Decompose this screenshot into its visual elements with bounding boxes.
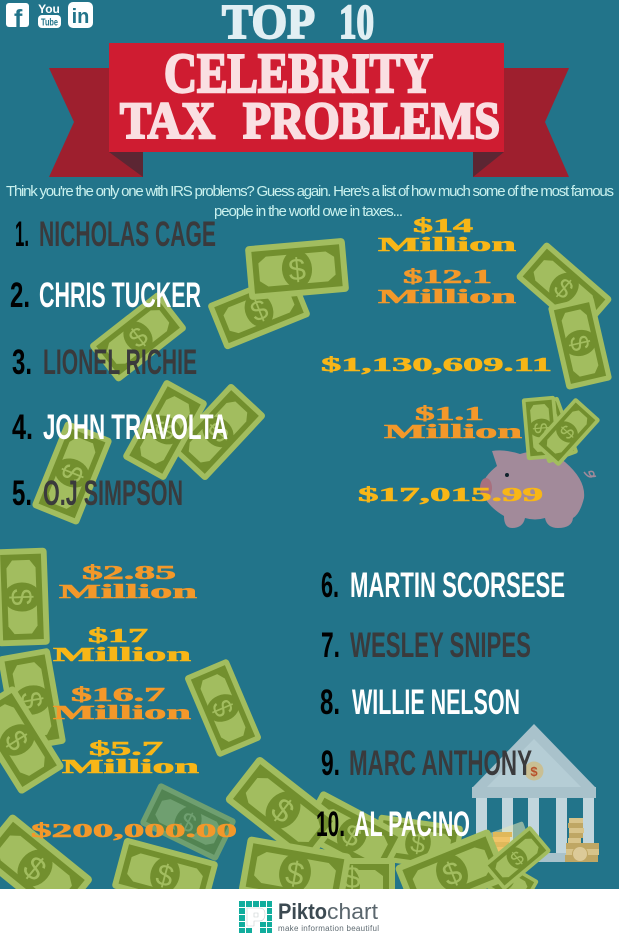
amount owed: 1: $14 [413,215,473,237]
intro text: Think you're the only one with IRS problems? Guess again. Here's a list of how much some of the most famous [6,183,614,200]
amount owed: 9 [62,738,199,778]
intro text: people in the world owe in taxes... [214,203,403,220]
name: LIONEL RICHIE [43,343,197,382]
bill: $ [123,320,154,354]
bill [89,291,187,383]
bill [394,828,510,918]
amount owed: 6: Million [59,581,197,603]
ribbon banner [49,43,569,177]
money bills: lower left [0,548,262,923]
bill [298,790,406,880]
bill (faded): $ [175,806,201,839]
bill: $ [206,695,240,721]
amount owed: 1: Million [378,234,516,256]
amount owed: 8 [53,684,191,724]
icon: LinkedIn: in [72,6,89,28]
icon: YouTube: Tube [41,18,58,28]
name: CHRIS TUCKER [39,276,201,315]
icon: Facebook: f [14,5,23,33]
amount owed: 6 [59,562,197,603]
money bills: in piggy bank [522,396,601,467]
bill [471,851,539,909]
amount owed: 7 [53,625,191,666]
wordmark: chart [327,899,378,924]
amount owed: 7: Million [53,644,191,666]
icon: piggy bank [480,450,596,528]
number 5: 5. [12,474,32,513]
ranked names: 6 to 10 [316,566,565,844]
bill: $ [409,827,428,859]
wordmark [278,899,378,924]
bill: $ [343,860,361,895]
bill: $ [437,853,467,893]
bill [184,658,262,758]
amount owed: 8: Million [53,702,191,724]
number 3: 3. [12,343,32,382]
coins behind bill [489,832,512,858]
bill: $ [556,421,580,444]
bill: $ [287,251,307,288]
number 9: 9. [321,744,340,783]
amount owed: 4: Million [384,421,522,443]
bill [373,814,463,872]
bill [238,836,352,910]
bill [528,396,578,464]
bill (translucent) [459,821,535,879]
number 7: 7. [321,626,340,665]
name: NICHOLAS CAGE [39,215,216,254]
bill: $ [202,416,235,449]
bill [548,296,612,390]
tagline: make information beautiful [278,924,379,933]
bill [0,685,65,795]
money bills: bottom pile [111,755,552,918]
amount owed: 8: $16.7 [71,684,165,706]
amount owed: 6: $2.85 [82,562,176,584]
amount owed: 4 [384,403,522,443]
number 10: 10. [316,805,345,844]
bill: $ [148,415,183,444]
title: Tax Problems [120,93,500,150]
number 2: 2. [10,276,30,315]
bill: $ [16,849,53,888]
intro text [6,183,614,220]
money bills: upper cluster [31,238,613,526]
bill [31,420,113,526]
bill: $ [563,333,596,354]
name: AL PACINO [354,805,470,844]
footer [0,889,619,936]
amount owed: 2 [378,266,516,308]
amount owed: 3: $1,130,609.11 [321,354,552,376]
bill: $ [548,271,580,305]
title: Tax Problems: PROBLEMS [243,93,500,150]
number 6: 6. [321,566,339,605]
bill [245,238,349,300]
bill [482,825,552,891]
bill (faded) [139,782,237,862]
bill: $ [529,422,551,435]
bill [224,755,342,865]
title: Top 10 [222,0,374,49]
icon: Facebook [6,3,29,33]
bill [207,270,311,350]
amount owed: 4: $1.1 [415,403,484,425]
bill: $ [4,588,38,606]
amount owed: 9: $5.7 [89,738,163,760]
icon: coin stacks [565,818,599,862]
icon: YouTube [38,2,61,28]
name: JOHN TRAVOLTA [43,408,228,447]
bill: $ [264,791,301,830]
icon: YouTube: You [38,2,60,16]
bill: $ [337,817,367,854]
number 4: 4. [12,408,33,447]
bill: $ [13,689,49,712]
amount owed: 1 [378,215,516,256]
icon: LinkedIn [68,2,93,28]
title: Celebrity: CELEBRITY [164,43,433,105]
icon: Piktochart logo [239,901,272,933]
bill [0,648,66,752]
number 8: 8. [320,683,340,722]
ranked names: 1 to 5 [10,215,228,513]
bill [0,813,94,923]
wordmark: Pikto [278,899,327,924]
amount owed: 5: $17,015.99 [358,484,543,506]
bill: $ [246,293,273,329]
bill: $ [55,460,91,487]
amount owed: 2: $12.1 [403,266,492,288]
bill [111,837,219,913]
amount owed: 2: Million [378,286,516,308]
name: WILLIE NELSON [352,683,520,722]
amount owed: 7: $17 [88,625,148,647]
title: Tax Problems: TAX [120,93,215,150]
bill: $ [507,847,529,870]
bill [170,383,266,481]
bill [122,379,208,481]
bill: $ [283,854,307,893]
bill: $ [152,858,177,894]
bill [0,548,50,646]
icon: bank building: $ [530,764,538,779]
ranked names: 1 to 5: 1. [15,215,29,254]
amount owed: 9: Million [62,756,199,778]
name: O.J SIMPSON [43,474,183,513]
icon: bank building [472,724,596,862]
bill [295,858,395,912]
bill [515,241,613,335]
amount owed: 10: $200,000.00 [31,820,237,842]
